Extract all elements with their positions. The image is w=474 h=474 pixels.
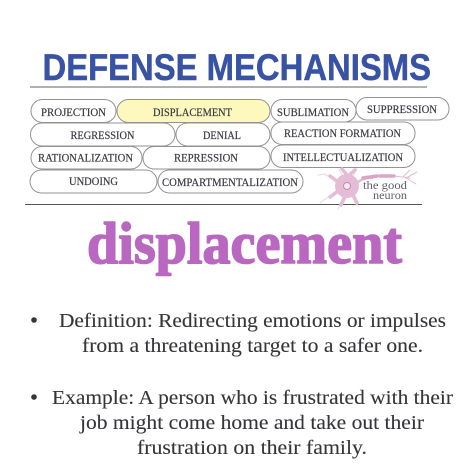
pill: repression <box>143 146 270 169</box>
pill: sublimation <box>271 100 356 122</box>
pill: displacement highlighted: DISPLACEMENT <box>153 107 232 119</box>
pill: suppression: SUPPRESSION <box>367 104 438 116</box>
logo text: the good <box>363 178 407 192</box>
pill: compartmentalization <box>158 170 303 193</box>
bullet <box>31 394 37 400</box>
pill: undoing <box>30 170 157 193</box>
pill: compartmentalization: COMPARTMENTALIZATION <box>162 177 299 189</box>
pill: intellectualization <box>271 145 415 168</box>
pill: regression <box>30 123 175 146</box>
pill: suppression <box>356 98 449 120</box>
mechanism pills <box>30 98 449 193</box>
definition text block: Definition: Redirecting emotions or impulses <box>59 310 446 332</box>
pill: intellectualization: INTELLECTUALIZATION <box>283 152 404 164</box>
logo: the good neuron <box>318 169 417 209</box>
logo: the good neuron: neuron <box>373 188 407 202</box>
bullet <box>31 317 37 323</box>
pill: projection: PROJECTION <box>41 107 107 119</box>
pill: displacement highlighted <box>117 100 270 122</box>
pill: regression: REGRESSION <box>70 130 135 142</box>
pill: denial: DENIAL <box>203 130 241 142</box>
heading: displacement: displacement <box>87 210 402 276</box>
pill: denial <box>176 123 270 146</box>
pill: undoing: UNDOING <box>69 176 118 188</box>
example text block: job might come home and take out their <box>79 412 424 434</box>
pill: rationalization: RATIONALIZATION <box>38 152 134 164</box>
example text block <box>31 387 453 459</box>
definition text block <box>31 310 446 357</box>
title: DEFENSE MECHANISMS <box>42 47 431 88</box>
pill: reaction formation <box>271 122 415 144</box>
icon: neuron <box>318 169 417 209</box>
pill: projection <box>31 100 116 122</box>
pill: reaction formation: REACTION FORMATION <box>284 128 402 140</box>
example text block: frustration on their family. <box>137 437 367 459</box>
pill: rationalization <box>31 146 142 169</box>
pill: repression: REPRESSION <box>174 152 239 164</box>
example text block: Example: A person who is frustrated with their <box>52 387 453 409</box>
definition text block: from a threatening target to a safer one. <box>82 335 423 357</box>
pill: sublimation: SUBLIMATION <box>277 107 350 119</box>
